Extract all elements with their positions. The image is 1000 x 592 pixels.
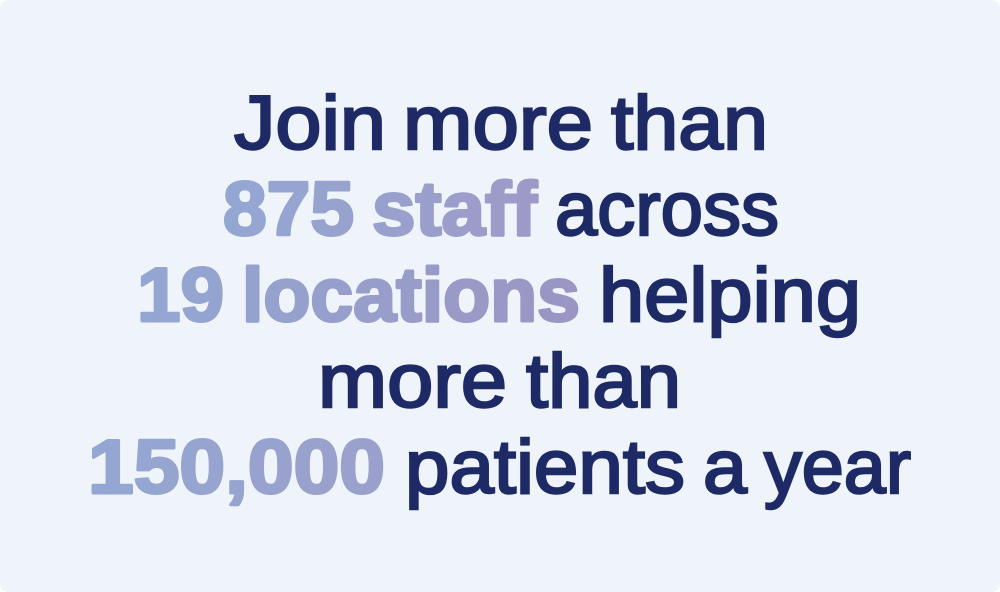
line 4: more than: than [526, 339, 681, 424]
line 2: 875 staff across: 875 [223, 167, 354, 252]
line 1: Join more than: than [611, 81, 768, 166]
line 2: 875 staff across: across [555, 167, 779, 252]
line 5: 150,000 patients a year [88, 425, 911, 510]
line 2: 875 staff across [223, 167, 779, 252]
line 5: 150,000 patients a year: a [703, 425, 748, 510]
line 4: more than [318, 339, 681, 424]
line 3: 19 locations helping: locations [242, 253, 580, 338]
line 3: 19 locations helping: 19 [137, 253, 224, 338]
line 4: more than: more [318, 339, 507, 424]
line 3: 19 locations helping: helping [599, 253, 861, 338]
line 5: 150,000 patients a year: patients [405, 425, 685, 510]
line 2: 875 staff across: staff [372, 167, 538, 252]
line 1: Join more than: Join [234, 81, 386, 166]
line 1: Join more than: more [403, 81, 593, 166]
line 1: Join more than [234, 81, 768, 166]
line 5: 150,000 patients a year: 150,000 [88, 425, 385, 510]
line 5: 150,000 patients a year: year [764, 425, 911, 510]
line 3: 19 locations helping [137, 253, 861, 338]
